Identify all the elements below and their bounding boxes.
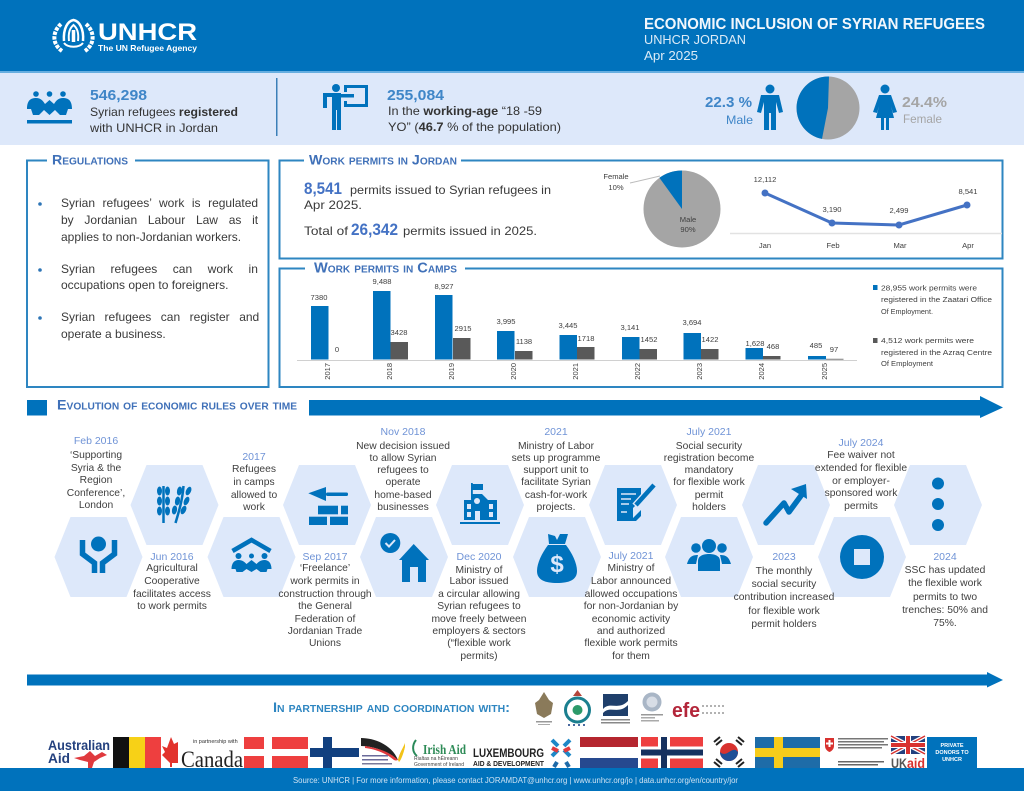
chart: camp permits bars: 2022: [633, 363, 642, 380]
text: Sep 2017: [278, 551, 372, 649]
text: 2017: in camps: [233, 477, 275, 488]
bullet list: Syrian refugees can register and: [61, 310, 259, 324]
text: Nov 2018: operate: [386, 477, 421, 488]
text: July 2021 upper: holders: [692, 502, 726, 513]
text: Nov 2018: home-based: [374, 490, 432, 501]
title block: UNHCR JORDAN: [644, 33, 746, 47]
text: July 2021 upper: for flexible work: [673, 477, 746, 488]
chart: monthly permits line: Apr: [962, 241, 974, 250]
text: 2021: 2021: [544, 426, 568, 438]
text: Sep 2017: Federation of: [295, 614, 355, 625]
bullet list: Syrian refugees’ work is regulated: [61, 196, 258, 210]
chart: camp permits bars: 2915: [455, 324, 471, 333]
text: July 2021 lower: for them: [612, 651, 650, 662]
text: Dec 2020: Labor issued: [450, 576, 509, 587]
chart: camp permits bars: 2024: [757, 363, 766, 380]
icon: male figure: [757, 84, 783, 130]
text: 2023: The monthly: [756, 566, 813, 577]
chart: camp permits bars: 2019: [447, 363, 456, 380]
text: 2024: permits to two: [913, 592, 977, 603]
bullet list: applies to non-Jordanian workers.: [61, 230, 241, 244]
chart: camp permits bars: 3,141: [620, 323, 640, 332]
text: Sep 2017: Jordanian Trade: [288, 626, 362, 637]
flag: Belgium: [113, 737, 161, 768]
text: Dec 2020: Syrian refugees to: [437, 601, 521, 612]
logo: blue wave: [601, 694, 630, 724]
logo wordmark: UNHCR: [98, 19, 197, 46]
text: Sep 2017: Sep 2017: [303, 551, 348, 563]
text: Jun 2016: Agricultural: [146, 563, 198, 574]
box: private donors: [927, 737, 977, 768]
text: 2023: social security: [752, 579, 817, 590]
chart: camp permits bars: 2025: [820, 363, 829, 380]
flag: Denmark: [244, 737, 308, 768]
bullet list: by Jordanian Labour Law as it: [61, 213, 259, 227]
text: July 2024: Fee waiver not: [827, 450, 895, 461]
box: private donors: DONORS TO: [935, 750, 969, 756]
panel: work permits in Jordan: [280, 152, 1002, 258]
legend: camp offices: registered in the Azraq Centre: [881, 350, 992, 357]
title block: Apr 2025: [644, 49, 698, 63]
stat: female share: Female: [903, 112, 942, 126]
panel: work permits in camps: [280, 260, 1002, 387]
text: Dec 2020: Dec 2020: [457, 551, 502, 563]
box: private donors: PRIVATE: [940, 743, 964, 749]
text: July 2021 upper: July 2021: [687, 426, 732, 438]
chart: monthly permits line: Feb: [826, 241, 840, 250]
text: 2017: Refugees: [232, 464, 276, 475]
icon: trowel and bricks: [283, 465, 371, 545]
logo: UK aid: [891, 736, 925, 771]
text: 2021: cash-for-work: [525, 490, 588, 501]
text: Dec 2020: move freely between: [431, 614, 527, 625]
icon: more dots: [894, 465, 982, 545]
chart: camp permits bars: 3,995: [496, 317, 516, 326]
arrow: timeline bottom: [27, 672, 1003, 688]
chart: camp permits bars: 1,628: [745, 339, 765, 348]
stat: male share: 22.3 %: [705, 94, 752, 111]
text: Nov 2018: businesses: [377, 502, 429, 513]
bullet list: Syrian refugees can work in: [61, 262, 258, 276]
chart: camp permits bars: 1452: [641, 335, 657, 344]
chart: monthly permits line: 3,190: [822, 205, 842, 214]
text: Nov 2018: Nov 2018: [381, 426, 426, 438]
chart: camp permits bars: 2023: [695, 363, 704, 380]
text: 2024: trenches: 50% and: [902, 605, 988, 616]
heading: work permits in camps: Work permits in Camps: [314, 260, 457, 276]
icon: UNHCR emblem: [54, 20, 93, 51]
icon: female figure: [873, 84, 897, 130]
chart: camp permits bars: 2021: [571, 363, 580, 380]
icon: document and pen: [589, 465, 677, 545]
icon: person at board: [323, 84, 368, 130]
text: 2023: permit holders: [751, 619, 817, 630]
text: July 2024: or employer-: [832, 476, 890, 487]
logo: Luxembourg: LUXEMBOURG: [473, 746, 544, 760]
text: July 2021 upper: [664, 426, 754, 513]
text: 2023: [734, 551, 835, 630]
legend: camp offices: 28,955 work permits were: [881, 286, 977, 292]
chart: camp permits bars: 3,445: [558, 321, 578, 330]
logo: Australian Aid: [48, 738, 110, 768]
text: Nov 2018: to allow Syrian: [370, 453, 437, 464]
logo: UK aid: aid: [907, 755, 925, 771]
icon: wheat: [130, 465, 218, 545]
text: Nov 2018: New decision issued: [356, 441, 450, 452]
text: July 2021 lower: Labor announced: [591, 576, 671, 587]
text: Jun 2016: Cooperative: [144, 576, 200, 587]
chart: camp permits bars: 468: [767, 342, 779, 351]
heading: partnership: In partnership and coordination with:: [273, 699, 510, 715]
icon: money bag: $: [550, 551, 564, 578]
logo: Swiss cooperation: [825, 738, 888, 766]
text: Feb 2016: London: [79, 500, 113, 511]
text: 2021: projects.: [537, 502, 575, 513]
chart: gender pie: [796, 76, 860, 140]
text: Feb 2016: Feb 2016: [74, 435, 118, 447]
text: July 2021 lower: Ministry of: [608, 563, 655, 574]
text: 2021: sets up programme: [512, 453, 601, 464]
chart: permits by gender pie: 90%: [680, 225, 696, 234]
logo: EFE: [672, 700, 724, 722]
text: Sep 2017: construction through: [278, 589, 372, 600]
text: Jun 2016: [133, 551, 211, 612]
chart: camp permits bars: [297, 277, 857, 380]
title block: ECONOMIC INCLUSION OF SYRIAN REFUGEES: [644, 16, 985, 33]
text: monthly permits: permits issued to Syrian refugees in: [350, 183, 551, 197]
timeline header arrow: [27, 396, 1003, 418]
panel: regulations: [27, 152, 268, 387]
text: Feb 2016: [67, 435, 125, 511]
icon: hands holding: [54, 517, 142, 597]
text: 2021: support unit to: [523, 465, 589, 476]
legend: camp offices: registered in the Zaatari Office: [881, 297, 992, 304]
logo: Australian Aid: Australian: [48, 738, 110, 753]
stat: registered refugees: [89, 87, 238, 135]
stat: registered refugees: Syrian refugees registered: [90, 105, 238, 119]
text: monthly permits: permits issued in 2025.: [403, 224, 537, 238]
text: monthly permits: [304, 180, 551, 239]
footer: [0, 768, 1024, 791]
text: 2017: 2017: [242, 451, 266, 463]
chart: camp permits bars: 3,694: [682, 318, 702, 327]
text: 2017: allowed to: [231, 490, 277, 501]
text: July 2021 lower: economic activity: [592, 614, 671, 625]
chart: monthly permits line: Mar: [893, 241, 907, 250]
text: Feb 2016: Region: [80, 475, 113, 486]
bullet list: operate a business.: [61, 327, 166, 341]
logo: Irish Aid: Rialtas na hÉireann: [414, 755, 458, 762]
text: Sep 2017: work permits in: [289, 576, 360, 587]
flag: South Korea: [714, 737, 744, 767]
logo: UNHCR: [54, 19, 197, 53]
chart: camp permits bars: 2020: [509, 363, 518, 380]
logo: EFE: efe: [672, 700, 700, 722]
logo: Irish Aid: Government of Ireland: [414, 762, 464, 768]
text: July 2021 lower: allowed occupations: [585, 589, 677, 600]
timeline: [54, 426, 988, 662]
text: 2024: 2024: [933, 551, 957, 563]
text: Dec 2020: permits): [460, 651, 498, 662]
text: Dec 2020: a circular allowing: [438, 589, 520, 600]
text: July 2021 lower: for non-Jordanian by: [584, 601, 679, 612]
legend: camp offices: Of Employment.: [881, 309, 933, 316]
text: July 2021 lower: July 2021: [609, 550, 654, 562]
logo: Luxembourg: [473, 746, 545, 768]
chart: permits by gender pie: Female: [603, 172, 629, 181]
text: July 2024: sponsored work: [825, 488, 898, 499]
chart: monthly permits line: 2,499: [889, 206, 909, 215]
text: Jun 2016: to work permits: [137, 601, 207, 612]
chart: camp permits bars: 97: [830, 345, 838, 354]
stat: registered refugees: with UNHCR in Jordan: [89, 121, 218, 135]
text: Dec 2020: [431, 551, 527, 662]
icon: home-based business: [360, 517, 448, 597]
text: monthly permits: 26,342: [351, 221, 398, 239]
text: July 2021 upper: registration become: [664, 453, 754, 464]
text: 2021: facilitate Syrian: [521, 477, 591, 488]
chart: camp permits bars: 2017: [323, 363, 332, 380]
flag: Finland: [310, 737, 359, 768]
chart: camp permits bars: 3428: [391, 328, 407, 337]
icon: shelter and family: [208, 517, 296, 597]
heading: evolution: Evolution of economic rules over time: [57, 396, 297, 412]
bullet list: [38, 196, 259, 341]
arrow: timeline top: [309, 396, 1003, 418]
logo: Germany: [361, 738, 405, 764]
text: Jun 2016: facilitates access: [133, 589, 211, 600]
chart: camp permits bars: 485: [810, 341, 822, 350]
flag: Norway: [641, 737, 703, 768]
chart: camp permits bars: 9,488: [372, 277, 392, 286]
logo: Irish Aid: [413, 740, 466, 768]
text: 2024: SSC has updated: [905, 565, 986, 576]
logo: UK aid: UK: [891, 755, 907, 771]
partner logos: [535, 690, 724, 725]
icon: refugee family: [27, 91, 72, 124]
chart: camp permits bars: 1718: [578, 334, 594, 343]
text: July 2021 lower: and authorized: [597, 626, 665, 637]
chart: permits by gender pie: 10%: [608, 183, 624, 192]
text: Jun 2016: Jun 2016: [150, 551, 194, 563]
stat: registered refugees: 546,298: [90, 87, 147, 104]
text: July 2024: extended for flexible: [815, 463, 907, 474]
logo: Irish Aid: Irish Aid: [423, 743, 466, 758]
chart: camp permits bars: 1422: [702, 335, 718, 344]
text: 2023: 2023: [772, 551, 796, 563]
chart: permits by gender pie: Male: [680, 215, 696, 224]
legend: camp offices: 4,512 work permits were: [881, 338, 974, 345]
icon: money bag: [513, 517, 601, 597]
header band: [0, 0, 1024, 73]
text: Dec 2020: Ministry of: [456, 565, 503, 576]
chart: camp permits bars: 1138: [516, 337, 532, 346]
stat: working age: [387, 87, 561, 134]
icon: ministry building: [436, 465, 524, 545]
text: July 2021 upper: mandatory: [685, 465, 734, 476]
heading: work permits in Jordan: Work permits in Jordan: [309, 152, 457, 168]
legend: camp offices: Of Employment: [881, 361, 933, 368]
icon: stop button: [818, 517, 906, 597]
text: Feb 2016: ‘Supporting: [70, 450, 122, 461]
text: July 2024: [815, 437, 907, 512]
text: Nov 2018: refugees to: [377, 465, 429, 476]
text: July 2021 lower: flexible work permits: [584, 638, 678, 649]
footer: Source: UNHCR | For more information, please contact JORAMDAT@unhcr.org | www.unhcr.org/jo | data.unhcr.org/en/country/jor: [293, 776, 738, 785]
logo: Canada: Canada: [181, 747, 243, 772]
text: Sep 2017: Unions: [309, 638, 341, 649]
text: July 2024: permits: [844, 501, 878, 512]
title block: [644, 16, 985, 63]
stat: female share: [902, 94, 947, 126]
text: monthly permits: Total of: [304, 224, 349, 238]
chart: permits by gender pie: [603, 170, 720, 248]
stat: working age: 255,084: [387, 87, 445, 104]
stat: working age: In the working-age “18 -59: [388, 104, 542, 118]
text: monthly permits: 8,541: [304, 180, 342, 198]
logo: Canada: [162, 737, 243, 772]
chart: camp permits bars: 8,927: [434, 282, 454, 291]
logo: ILO: [641, 692, 663, 722]
stat: male share: Male: [726, 113, 753, 127]
bullet list: occupations open to foreigners.: [61, 278, 228, 292]
text: Nov 2018: [356, 426, 450, 513]
logo: Australian Aid: Aid: [48, 751, 70, 766]
logo tagline: The UN Refugee Agency: [98, 43, 197, 53]
logo: circular emblem: [566, 690, 590, 725]
logo: Luxembourg: AID & DEVELOPMENT: [473, 761, 545, 768]
chart: camp permits bars: 7380: [311, 293, 327, 302]
text: 2017: [231, 451, 277, 513]
chart: monthly permits line: [730, 175, 1002, 250]
text: July 2021 upper: Social security: [676, 441, 743, 452]
text: 2023: for flexible work: [748, 606, 821, 617]
text: Feb 2016: Syria & the: [71, 463, 121, 474]
donor logos: [48, 736, 977, 772]
text: 2021: Ministry of Labor: [518, 441, 595, 452]
legend: camp offices: [873, 285, 992, 368]
text: 2024: 75%.: [933, 618, 957, 629]
text: 2021: [512, 426, 601, 513]
box: private donors: UNHCR: [942, 757, 962, 763]
heading: regulations: Regulations: [52, 152, 128, 168]
text: monthly permits: Apr 2025.: [304, 198, 362, 212]
text: Feb 2016: Conference’,: [67, 488, 125, 499]
text: Sep 2017: ‘Freelance’: [300, 563, 350, 574]
icon: rising arrow: [742, 465, 830, 545]
logo: Canada: in partnership with: [193, 739, 238, 745]
chart: monthly permits line: Jan: [759, 241, 771, 250]
chart: camp permits bars: 0: [335, 345, 339, 354]
icon: group of people: [665, 517, 753, 597]
panel: key figures band: [0, 73, 1024, 145]
text: July 2021 upper: permit: [695, 490, 723, 501]
text: July 2021 lower: [584, 550, 679, 662]
text: 2023: contribution increased: [734, 592, 835, 603]
text: July 2024: July 2024: [839, 437, 884, 449]
chart: monthly permits line: 12,112: [754, 175, 776, 184]
text: 2024: [902, 551, 988, 629]
logo: Jordan emblem: [535, 692, 553, 725]
chart: monthly permits line: 8,541: [958, 187, 978, 196]
stat: male share: [705, 94, 753, 127]
chart: camp permits bars: 2018: [385, 363, 394, 380]
stat: working age: YO” (46.7 % of the population): [388, 120, 561, 134]
text: Dec 2020: (“flexible work: [447, 638, 512, 649]
flag: Netherlands: [580, 737, 638, 768]
text: 2017: work: [242, 502, 266, 513]
text: 2024: the flexible work: [908, 578, 983, 589]
flag: Sweden: [755, 737, 820, 768]
text: Dec 2020: employers & sectors: [432, 626, 526, 637]
text: Sep 2017: the General: [298, 601, 352, 612]
stat: female share: 24.4%: [902, 94, 947, 111]
logo: cross pattern: [552, 740, 570, 767]
